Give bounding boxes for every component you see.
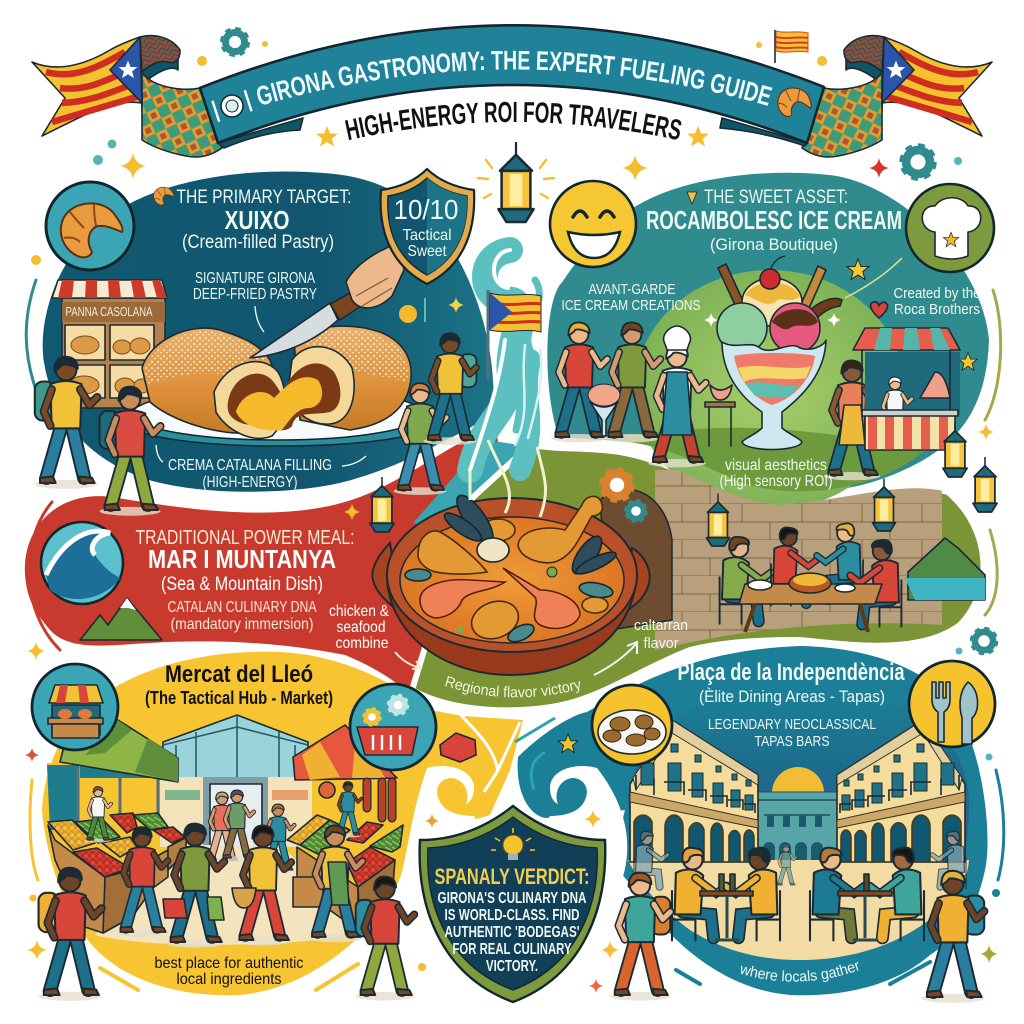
traveler woman with camera bbox=[610, 873, 670, 1001]
decoration: side arcs bbox=[26, 280, 1004, 990]
subtitle: HIGH-ENERGY ROI FOR TRAVELERS bbox=[344, 102, 682, 140]
icon: small cone bbox=[687, 192, 697, 204]
market note line 2: local ingredients bbox=[176, 971, 282, 988]
shopper pair in doorway bbox=[205, 790, 254, 863]
plaza title: Plaça de la Independència bbox=[678, 659, 905, 686]
subtitle: (Cream-filled Pastry) bbox=[182, 232, 334, 253]
icon: croissant bbox=[46, 182, 134, 270]
market title: Mercat del Lleó bbox=[165, 661, 313, 688]
ice cream stand bbox=[853, 328, 960, 450]
verdict line 1: GIRONA'S CULINARY DNA bbox=[438, 890, 586, 907]
wall lanterns bbox=[706, 478, 896, 546]
shield: 10/10 tactical sweet: Sweet bbox=[408, 243, 447, 260]
diners right bbox=[810, 848, 924, 940]
gears bbox=[603, 471, 995, 654]
icon: light bulb bbox=[491, 828, 535, 860]
mountain and lake view bbox=[905, 538, 985, 600]
mussels and clams bbox=[441, 490, 618, 578]
traveler man with camera bbox=[922, 871, 984, 1003]
regional flavor text: Regional flavor victory bbox=[445, 676, 580, 698]
panel: yellow market background bbox=[42, 652, 523, 995]
icon: hanging lantern top bbox=[478, 142, 554, 222]
sundae bbox=[704, 256, 842, 450]
traveler: woman right bbox=[394, 383, 446, 495]
stars and heart bbox=[845, 258, 977, 370]
side note: chicken & bbox=[329, 603, 389, 620]
diner: woman red bbox=[771, 527, 817, 606]
side note line 2: seafood bbox=[336, 619, 386, 636]
caption line 2: (HIGH-ENERGY) bbox=[202, 474, 298, 491]
right flag ribbon bbox=[802, 36, 992, 157]
diner: man red bbox=[850, 540, 901, 627]
note: SIGNATURE GIRONA bbox=[195, 270, 315, 287]
bakery shop: PANNA CASOLANA bbox=[66, 304, 153, 319]
banner ribbon body bbox=[200, 25, 824, 143]
sparkle bbox=[344, 504, 360, 520]
note line 2: (mandatory immersion) bbox=[170, 616, 314, 633]
sparkle left bbox=[27, 642, 45, 660]
sparks near shield bbox=[399, 297, 464, 323]
chef with apron bbox=[648, 326, 706, 467]
wave icon bbox=[41, 522, 123, 604]
section: Ice cream bbox=[550, 181, 997, 512]
heading: THE PRIMARY TARGET: bbox=[176, 187, 352, 208]
cutlery icon bbox=[909, 661, 995, 747]
small decorations bbox=[558, 734, 1000, 993]
chicken pieces bbox=[418, 496, 608, 645]
apron on woman bbox=[839, 405, 865, 445]
section: Mercat del Lleó bbox=[25, 661, 476, 1001]
note: flavor: flavor bbox=[644, 635, 678, 652]
woman with tray bbox=[824, 360, 880, 480]
section: Xuixo bbox=[35, 169, 476, 516]
arrow up bbox=[594, 642, 637, 675]
vendor left bbox=[85, 787, 111, 842]
basket icon bbox=[350, 684, 436, 770]
market shopper in red bbox=[116, 827, 168, 937]
stone arch bbox=[600, 489, 672, 630]
decoration: wedge lines bbox=[458, 706, 590, 792]
subtitle: (Sea & Mountain Dish) bbox=[161, 574, 323, 595]
shopping bags bbox=[163, 888, 256, 920]
bakery shop bbox=[52, 280, 167, 408]
lanterns right bbox=[943, 422, 997, 512]
panel: teal wedge behind dish bbox=[413, 440, 520, 540]
handles bbox=[372, 543, 650, 613]
woman in teal behind bbox=[262, 804, 294, 873]
note: CATALAN CULINARY DNA bbox=[168, 599, 317, 616]
small Catalan flag bbox=[488, 290, 541, 380]
diners left bbox=[672, 848, 780, 940]
shield: 10/10 tactical sweet: 10/10 bbox=[394, 194, 458, 225]
diner: man blue bbox=[817, 523, 863, 602]
mountain icon bbox=[80, 598, 162, 640]
left flag ribbon bbox=[32, 36, 222, 157]
shopper with basket bbox=[235, 825, 291, 945]
person in red with blond hair bbox=[551, 322, 607, 442]
person in olive bbox=[604, 322, 660, 442]
panel: Xuixo dark teal background bbox=[39, 168, 497, 495]
caption: visual aesthetics bbox=[725, 457, 827, 474]
traveler: walking green trousers bbox=[100, 387, 160, 516]
traveler: man with pack bbox=[424, 333, 476, 445]
panel: red Mar i Muntanya background bbox=[25, 425, 520, 697]
caption: CREMA CATALANA FILLING bbox=[168, 457, 332, 474]
traveler right with phone bbox=[356, 877, 414, 1000]
verdict heading: SPANALY VERDICT: bbox=[434, 864, 590, 889]
note line 2: DEEP-FRIED PASTRY bbox=[193, 286, 317, 303]
title: XUIXO bbox=[224, 205, 290, 235]
caption line 2: (High sensory ROI) bbox=[720, 473, 832, 490]
produce stalls left bbox=[48, 813, 187, 933]
pastry: xuixo cut open bbox=[142, 326, 411, 438]
shopper central bbox=[166, 824, 224, 947]
note: caltarran: caltarran bbox=[634, 617, 688, 634]
stall icon bbox=[32, 664, 118, 750]
icon: small croissant bbox=[154, 187, 174, 205]
table and food bbox=[739, 573, 882, 632]
smiley icon bbox=[550, 181, 636, 267]
plaza subtitle: (Èlite Dining Areas - Tapas) bbox=[699, 687, 885, 706]
subtitle: (Girona Boutique) bbox=[710, 235, 838, 254]
panel: ice cream background bbox=[544, 170, 992, 510]
title: MAR I MUNTANYA bbox=[148, 544, 336, 574]
produce stalls right bbox=[287, 815, 403, 930]
diner: woman green bbox=[720, 537, 771, 624]
vendor with apron bbox=[307, 825, 363, 942]
title banner with flags bbox=[31, 24, 993, 198]
note avant-garde: AVANT-GARDE bbox=[588, 281, 676, 298]
banner tail right bbox=[720, 118, 807, 146]
verdict line 5: VICTORY. bbox=[486, 958, 538, 975]
heading: THE SWEET ASSET: bbox=[704, 187, 848, 208]
market scene bbox=[47, 715, 398, 945]
market subtitle: (The Tactical Hub - Market) bbox=[145, 688, 333, 708]
icon: croissant in banner bbox=[775, 84, 815, 122]
plaza scene bbox=[628, 690, 969, 960]
note avant-garde line 2: ICE CREAM CREATIONS bbox=[562, 297, 700, 314]
heading: TRADITIONAL POWER MEAL: bbox=[136, 527, 354, 549]
callout strokes bbox=[156, 306, 366, 466]
banner tail left bbox=[218, 118, 303, 148]
panel: olive Catalan dining background bbox=[412, 445, 983, 710]
traveler: eating left bbox=[35, 357, 97, 489]
side note line 3: combine bbox=[336, 635, 389, 652]
decoration: teal stripe and comma bbox=[515, 718, 555, 790]
note Roca line 2: Roca Brothers bbox=[894, 301, 980, 318]
stone cellar wall bbox=[655, 470, 942, 650]
note Roca: Created by the bbox=[894, 285, 980, 302]
hanging sausages bbox=[319, 782, 392, 818]
decoration: white swirl over market bbox=[400, 766, 500, 880]
decoration: central teal steam swirl bbox=[470, 250, 541, 470]
panel: plaza teal background bbox=[518, 646, 988, 995]
plaza note line 2: TAPAS BARS bbox=[754, 733, 830, 750]
verdict line 2: IS WORLD-CLASS. FIND bbox=[444, 907, 580, 924]
decoration: white swirl over plaza bbox=[520, 766, 627, 880]
icon: plate and cutlery bbox=[212, 90, 252, 122]
title: ROCAMBOLESC ICE CREAM bbox=[646, 205, 902, 235]
small top flag bbox=[775, 30, 808, 63]
verdict line 3: AUTHENTIC 'BODEGAS' bbox=[444, 924, 580, 941]
small decorations bbox=[25, 733, 476, 971]
plaza caption: where locals gather bbox=[741, 962, 858, 982]
side table and bowl bbox=[705, 385, 735, 446]
plate bbox=[130, 388, 430, 446]
section: Mar i Muntanya bbox=[27, 477, 421, 669]
chef hat icon bbox=[906, 184, 994, 272]
shrimp bbox=[420, 568, 580, 628]
lantern on red bbox=[370, 477, 394, 532]
section: Catalan dining bbox=[445, 470, 986, 698]
tapas icon bbox=[592, 685, 672, 765]
arrow bbox=[395, 652, 421, 669]
traveler left with backpack bbox=[39, 868, 101, 1001]
market note: best place for authentic bbox=[154, 955, 304, 972]
shield: 10/10 tactical sweet bbox=[381, 169, 474, 284]
verdict line 4: FOR REAL CULINARY bbox=[452, 941, 572, 958]
small sundae bbox=[588, 384, 620, 436]
shield: 10/10 tactical sweet: Tactical bbox=[402, 227, 452, 244]
vendor right bbox=[335, 782, 361, 837]
banner title text: GIRONA GASTRONOMY: THE EXPERT FUELING GUIDE bbox=[257, 50, 772, 106]
knife and hand bbox=[250, 243, 404, 358]
clay dish: chicken and seafood bbox=[372, 440, 650, 675]
decorative icons top bbox=[31, 30, 962, 265]
plaza note: LEGENDARY NEOCLASSICAL bbox=[708, 716, 876, 733]
section: Plaça de la Independència bbox=[557, 659, 1000, 1003]
shield: verdict bbox=[420, 806, 605, 1002]
steam bbox=[470, 440, 546, 517]
